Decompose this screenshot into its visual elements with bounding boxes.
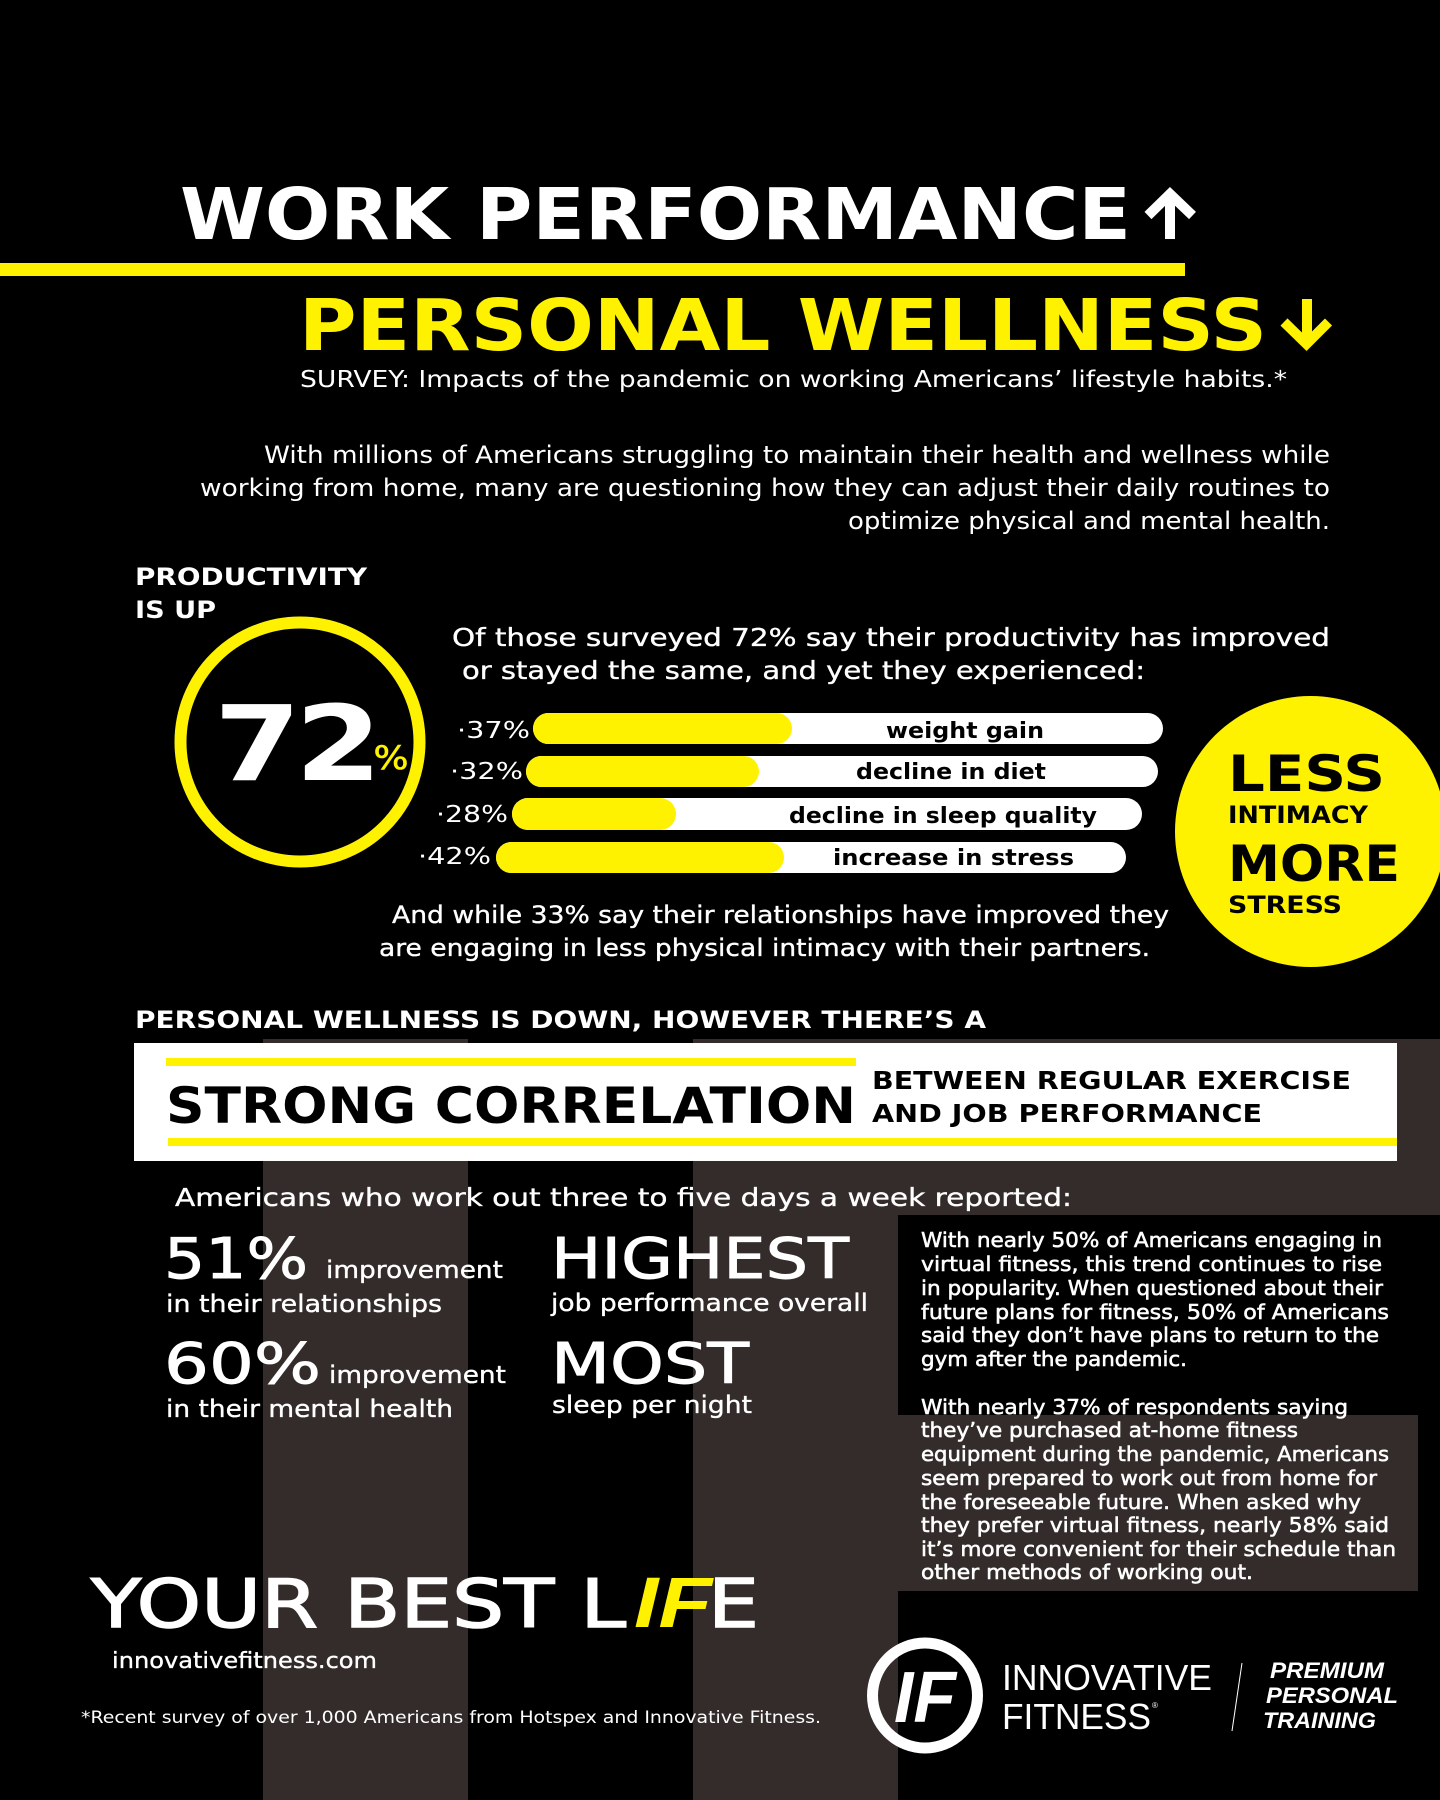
text block: virtual fitness: gym after the pandemic. (921, 1347, 1187, 1371)
text block: virtual fitness: said they don’t have plans to return to the (921, 1323, 1379, 1347)
text block: at-home equipment: they prefer virtual fitness, nearly 58% said (921, 1513, 1389, 1537)
bar: decline in diet 32%: ·32% (450, 759, 523, 785)
bar: decline in diet 32%: decline in diet (856, 760, 1047, 785)
intro paragraph: With millions of Americans struggling to maintain their health and wellness while (264, 441, 1330, 469)
tagline: your best life: YOUR BEST L (90, 1565, 626, 1643)
heading: productivity is up: PRODUCTIVITY (135, 563, 368, 591)
logo: innovative fitness (872, 1643, 1398, 1748)
logo tagline: PREMIUM (1270, 1658, 1385, 1683)
bar: decline in diet 32% (450, 756, 1158, 787)
text block: virtual fitness: virtual fitness, this trend continues to rise (921, 1252, 1382, 1276)
section heading: PERSONAL WELLNESS IS DOWN, HOWEVER THERE’S A (135, 1006, 986, 1034)
website: innovativefitness.com (112, 1649, 377, 1674)
bar: weight gain 37%: ·37% (457, 718, 530, 744)
stat: 60% mental health (164, 1332, 506, 1423)
stat: 60% mental health: 60% (164, 1332, 321, 1397)
stat: 51% relationships: 51% (164, 1227, 308, 1292)
productivity text: Of those surveyed 72% say their productivity has improved (452, 623, 1330, 652)
callout: less intimacy more stress: LESS (1228, 745, 1385, 803)
bar: increase in stress 42% (418, 842, 1126, 873)
stat circle: 72%: % (374, 739, 408, 777)
bar: decline in sleep quality 28% (436, 798, 1142, 830)
stat: 60% mental health: improvement (329, 1361, 506, 1389)
panel: strong correlation banner: AND JOB PERFORMANCE (872, 1099, 1262, 1128)
relationships text: are engaging in less physical intimacy with their partners. (379, 934, 1150, 962)
logo wordmark (1002, 1657, 1212, 1737)
intro paragraph: working from home, many are questioning how they can adjust their daily routines to (200, 474, 1330, 502)
logo mark: IF (894, 1658, 958, 1738)
relationships text (379, 901, 1169, 962)
productivity text: or stayed the same, and yet they experienced: (462, 656, 1145, 685)
bar: decline in sleep quality 28%: ·28% (436, 802, 508, 828)
bar: weight gain 37% (457, 713, 1163, 744)
intro paragraph (200, 441, 1330, 535)
logo tagline (1263, 1658, 1398, 1733)
bar: decline in sleep quality 28%: decline in sleep quality (789, 804, 1097, 829)
stat: 60% mental health: in their mental health (166, 1395, 453, 1423)
footnote: *Recent survey of over 1,000 Americans from Hotspex and Innovative Fitness. (81, 1708, 821, 1728)
bar: weight gain 37%: weight gain (886, 719, 1044, 744)
title: personal wellness: PERSONAL WELLNESS (299, 284, 1267, 367)
stat: 51% relationships: improvement (326, 1256, 503, 1284)
callout: less intimacy more stress (1175, 696, 1440, 967)
tagline: your best life: E (708, 1565, 759, 1643)
text block: virtual fitness: in popularity. When questioned about their (921, 1276, 1384, 1300)
logo mark (872, 1643, 978, 1748)
stat circle: 72% (180, 622, 420, 862)
heading: productivity is up (135, 563, 368, 624)
logo tagline: TRAINING (1263, 1708, 1376, 1733)
callout: less intimacy more stress: INTIMACY (1228, 801, 1369, 829)
bar chart: lifestyle impacts (418, 713, 1163, 873)
stat circle: 72%: 2 (295, 683, 382, 805)
stat: highest job performance: job performance overall (550, 1289, 868, 1317)
stat: most sleep: MOST (551, 1332, 750, 1397)
icon: up arrow (1148, 194, 1192, 239)
title: work performance: WORK PERFORMANCE (180, 173, 1131, 256)
text block: at-home equipment: With nearly 37% of respondents saying (921, 1395, 1348, 1419)
text block: at-home equipment: the foreseeable future. When asked why (921, 1490, 1361, 1514)
text block: virtual fitness (921, 1228, 1389, 1371)
text block: at-home equipment: other methods of working out. (921, 1560, 1253, 1584)
icon: down arrow (1284, 299, 1328, 344)
logo wordmark: FITNESS (1002, 1696, 1151, 1737)
stat: highest job performance (550, 1227, 868, 1317)
text block: virtual fitness: With nearly 50% of Americans engaging in (921, 1228, 1382, 1252)
text block: at-home equipment: it’s more convenient for their schedule than (921, 1537, 1396, 1561)
intro paragraph: optimize physical and mental health. (848, 507, 1330, 535)
callout: less intimacy more stress: STRESS (1228, 891, 1342, 919)
text block: at-home equipment: equipment during the pandemic, Americans (921, 1442, 1389, 1466)
yellow divider rule (0, 263, 1185, 276)
tagline: your best life: IF (634, 1564, 714, 1643)
heading: productivity is up: IS UP (135, 596, 216, 624)
stat: highest job performance: HIGHEST (551, 1227, 850, 1292)
bar: increase in stress 42%: ·42% (418, 844, 491, 870)
logo wordmark: INNOVATIVE (1002, 1657, 1212, 1698)
stat circle: 72%: 7 (214, 683, 301, 805)
tagline: your best life (90, 1564, 759, 1643)
panel: strong correlation banner: BETWEEN REGULAR EXERCISE (872, 1066, 1351, 1095)
productivity text (452, 623, 1330, 685)
text block: virtual fitness: future plans for fitness, 50% of Americans (921, 1300, 1389, 1324)
stat: 51% relationships: in their relationships (166, 1290, 442, 1318)
panel: strong correlation banner: STRONG CORRELATION (166, 1077, 856, 1135)
stat: most sleep (551, 1332, 752, 1419)
logo wordmark: ® (1152, 1701, 1158, 1710)
callout: less intimacy more stress: MORE (1228, 835, 1400, 893)
text block: at-home equipment (921, 1395, 1396, 1584)
panel: strong correlation banner (134, 1043, 1397, 1161)
text block: at-home equipment: seem prepared to work out from home for (921, 1466, 1378, 1490)
stats intro: Americans who work out three to five days a week reported: (175, 1183, 1072, 1212)
logo tagline: PERSONAL (1266, 1683, 1398, 1708)
text block: at-home equipment: they’ve purchased at-home fitness (921, 1418, 1298, 1442)
stat: 51% relationships (164, 1227, 503, 1318)
relationships text: And while 33% say their relationships have improved they (392, 901, 1169, 929)
bar: increase in stress 42%: increase in stress (833, 846, 1074, 871)
survey subtitle: SURVEY: Impacts of the pandemic on working Americans’ lifestyle habits.* (300, 367, 1287, 393)
stat: most sleep: sleep per night (552, 1391, 752, 1419)
